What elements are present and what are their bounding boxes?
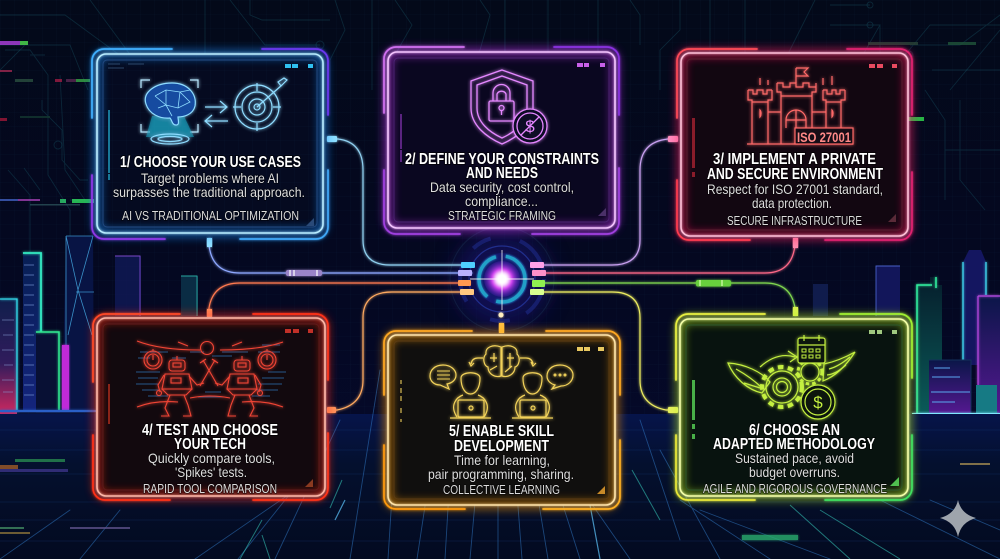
heading 4: YOUR TECH (174, 436, 246, 453)
description 3: data protection. (752, 195, 832, 211)
robot right (215, 356, 262, 416)
heading 6: 6/ CHOOSE AN (749, 422, 840, 439)
description 4 (148, 450, 275, 480)
icon: shield with padlock and crossed-out dollar (471, 70, 547, 144)
description 2: compliance... (465, 193, 538, 209)
connector: card 3 left to hub (535, 136, 678, 265)
floor grid (0, 370, 1000, 559)
connector: card 6 top to hub (535, 280, 798, 316)
card 6 frame (676, 314, 912, 500)
icon: sparkle watermark (940, 500, 976, 537)
card 1: choose your use cases (92, 49, 328, 239)
card 2 frame (384, 47, 619, 234)
tag 6: AGILE AND RIGOROUS GOVERNANCE (703, 482, 887, 496)
heading 4: 4/ TEST AND CHOOSE (142, 422, 278, 439)
skyline: left (0, 236, 198, 415)
tag 5: COLLECTIVE LEARNING (443, 483, 560, 497)
tag 4: RAPID TOOL COMPARISON (143, 482, 277, 496)
tag 3: SECURE INFRASTRUCTURE (727, 214, 862, 228)
person right (512, 373, 553, 418)
heading 5 (449, 423, 554, 455)
description 4: Quickly compare tools, (148, 450, 275, 466)
robot left (156, 356, 204, 416)
icon: shield with padlock and crossed-out dollar: $ (525, 117, 535, 136)
data panels (136, 345, 286, 397)
description 3: Respect for ISO 27001 standard, (707, 181, 883, 197)
skyline: right (813, 220, 1000, 415)
person left (450, 373, 491, 418)
heading 3: 3/ IMPLEMENT A PRIVATE (713, 151, 876, 168)
heading 2: AND NEEDS (466, 165, 538, 182)
card 1 frame (92, 49, 328, 239)
icon: winged gears, calendar and coin (728, 335, 855, 419)
heading 3: AND SECURE ENVIRONMENT (707, 166, 883, 183)
heading 5: DEVELOPMENT (454, 438, 549, 455)
card 3 frame (677, 49, 912, 240)
description 4: 'Spikes' tests. (175, 464, 247, 480)
heading 4 (142, 422, 278, 453)
connector: card 2 to hub (500, 232, 502, 275)
description 1: surpasses the traditional approach. (113, 184, 305, 200)
connector: card 4 right to hub (327, 292, 470, 413)
description 6: budget overruns. (749, 464, 840, 480)
card 3: implement a private and secure environment (677, 49, 912, 240)
connector lines and hub (207, 136, 798, 413)
card 4: test and choose your tech (93, 314, 328, 500)
hub cross flare (470, 250, 534, 310)
connector: card 1 bottom to hub (207, 238, 472, 276)
circuit traces (0, 0, 1000, 290)
card 5: enable skill development (384, 331, 620, 509)
hub rings (450, 227, 554, 331)
icon: collaborating developers with shared brain (430, 346, 573, 418)
connector: card 1 right to hub (327, 136, 465, 265)
tag 1: AI VS TRADITIONAL OPTIMIZATION (122, 209, 299, 223)
icon: winged gears, calendar and coin: $ (813, 393, 823, 412)
description 1: Target problems where AI (141, 170, 279, 186)
connector: card 3 bottom to hub (535, 238, 798, 273)
card 4 frame (93, 314, 328, 500)
description 6: Sustained pace, avoid (735, 450, 854, 466)
description 5: pair programming, sharing. (428, 466, 574, 482)
card 6: choose an adapted methodology (676, 314, 912, 500)
heading 5: 5/ ENABLE SKILL (449, 423, 554, 440)
description 5 (428, 452, 574, 482)
connector: card 6 left to hub (535, 292, 678, 413)
description 2 (430, 179, 574, 209)
hub port connectors (458, 262, 546, 295)
description 6 (735, 450, 854, 480)
description 1 (113, 170, 305, 200)
heading 2: 2/ DEFINE YOUR CONSTRAINTS (405, 151, 599, 168)
connector: card 5 to hub (498, 285, 504, 333)
card 5 frame (384, 331, 620, 509)
heading 2 (405, 151, 599, 182)
icon: castle with ISO 27001 plaque (747, 68, 853, 145)
card 2: define your constraints and needs (384, 47, 619, 234)
tag 2: STRATEGIC FRAMING (448, 209, 556, 223)
icon: brain and target (141, 78, 287, 144)
icon: castle with ISO 27001 plaque: ISO 27001 (797, 130, 851, 145)
heading 3 (707, 151, 883, 183)
icon: dueling robots (136, 341, 286, 416)
heading 6: ADAPTED METHODOLOGY (713, 436, 876, 453)
heading 1: 1/ CHOOSE YOUR USE CASES (120, 154, 301, 171)
description 3 (707, 181, 883, 211)
description 2: Data security, cost control, (430, 179, 574, 195)
connector: card 4 top to hub (207, 283, 470, 317)
description 5: Time for learning, (454, 452, 550, 468)
heading 6 (713, 422, 876, 453)
